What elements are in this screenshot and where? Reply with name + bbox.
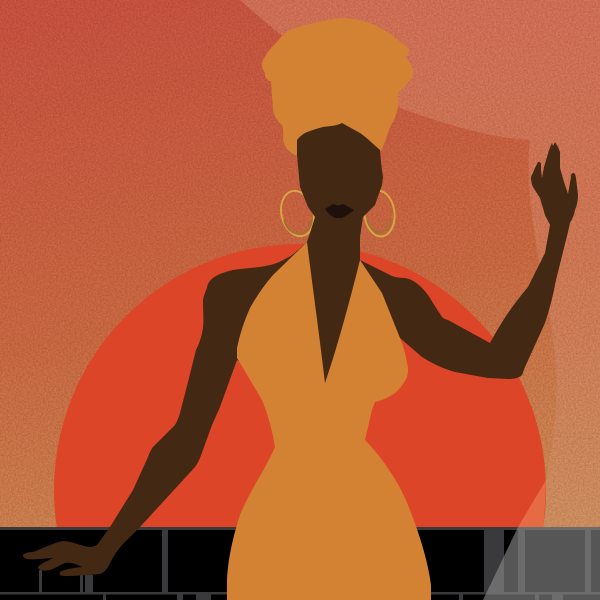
right earring <box>362 189 397 238</box>
glass reflection <box>483 527 600 600</box>
sun <box>54 244 546 527</box>
headwrap <box>262 18 413 170</box>
sun light wedge <box>518 480 546 527</box>
window wall <box>0 527 600 600</box>
neck, shoulders, arms and face <box>23 123 578 576</box>
light curved band <box>240 0 600 527</box>
halter dress <box>227 242 431 600</box>
window frames <box>0 530 600 600</box>
left earring <box>276 187 319 240</box>
lips <box>325 204 354 218</box>
